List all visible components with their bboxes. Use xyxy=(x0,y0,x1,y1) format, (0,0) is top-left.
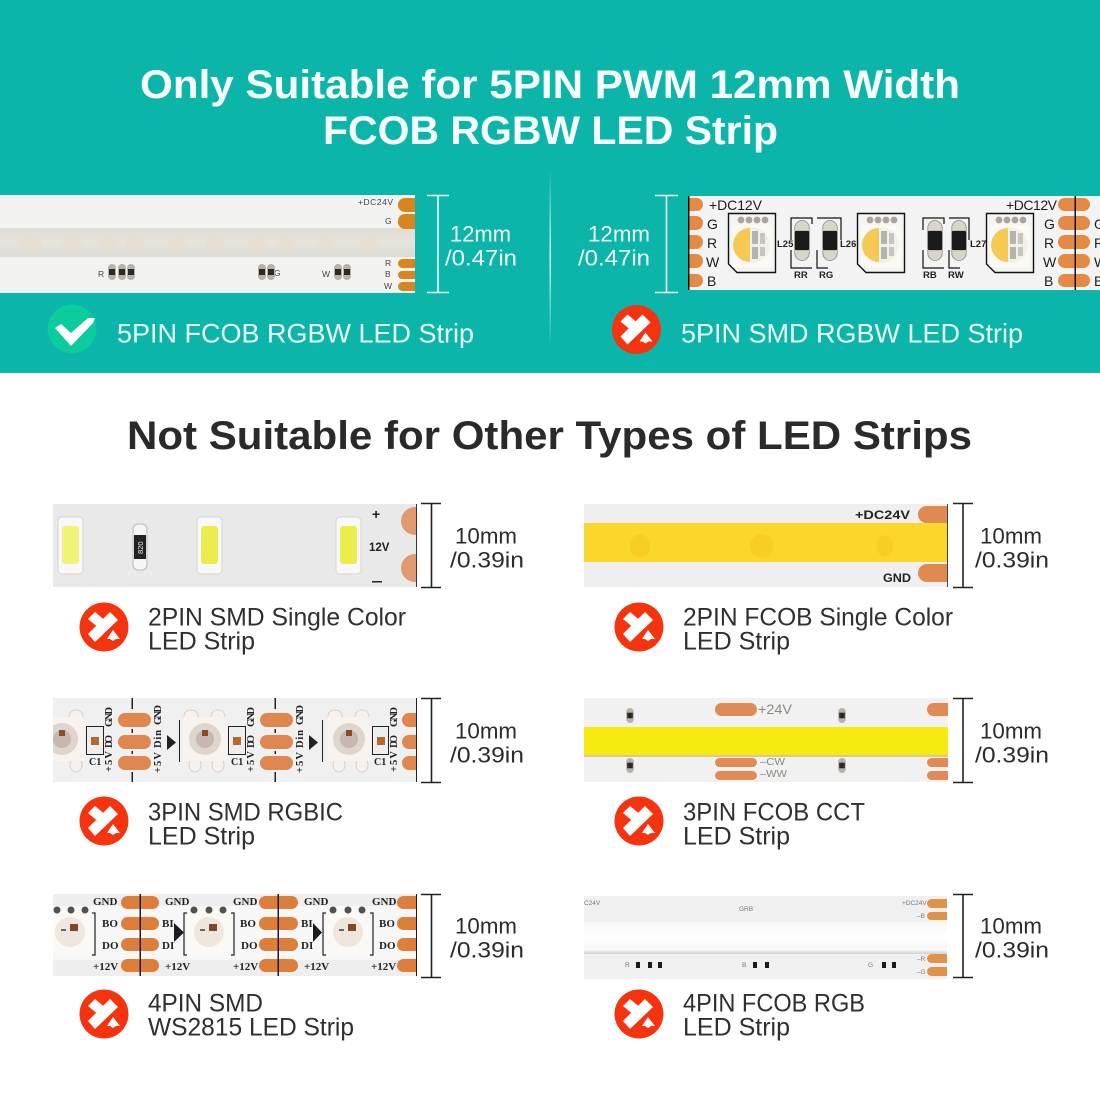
strip photo: 3PIN FCOB CCT xyxy=(584,698,967,782)
strip photo: 3PIN RGBIC: GND xyxy=(295,705,306,725)
strip photo: 2PIN FCOB: GND xyxy=(883,571,911,585)
dimension bracket xyxy=(953,698,973,782)
dimension text xyxy=(975,718,1049,768)
label xyxy=(683,604,953,656)
strip photo: 3PIN RGBIC: Din xyxy=(295,730,306,748)
dimension text: 12mm / 0.47in: /0.47in xyxy=(445,246,517,270)
strip photo: 4PIN WS2815: GND xyxy=(233,896,258,908)
strip photo: 4PIN FCOB RGB: G xyxy=(868,962,873,969)
strip photo: 4PIN WS2815 xyxy=(48,894,437,976)
strip photo: 3PIN RGBIC: GND xyxy=(389,707,400,727)
strip photo: 2PIN SMD: 820 xyxy=(136,541,145,554)
icon: red cross xyxy=(614,602,664,652)
panel: 4PIN FCOB RGB xyxy=(584,894,1049,1042)
strip photo: 4PIN WS2815: DO xyxy=(102,940,119,952)
strip photo: 4PIN WS2815: +12V xyxy=(371,961,396,973)
dimension bracket xyxy=(421,504,441,588)
strip photo: 5PIN SMD RGBW: RW xyxy=(948,270,964,281)
strip photo: 4PIN WS2815: BO xyxy=(379,918,395,930)
strip photo: 2PIN SMD: 12V xyxy=(369,542,390,554)
dimension text: 12mm / 0.47in: 12mm xyxy=(450,222,511,246)
dimension text xyxy=(975,914,1049,962)
strip photo: 5PIN FCOB RGBW: G xyxy=(274,268,281,278)
strip photo: 2PIN FCOB xyxy=(584,504,958,587)
dimension bracket xyxy=(421,894,441,978)
panel: suitable FCOB RGBW strip xyxy=(0,195,517,354)
icon: red cross xyxy=(614,796,664,846)
strip photo: 5PIN SMD RGBW: B xyxy=(707,273,716,289)
strip photo: 5PIN SMD RGBW: L27 xyxy=(970,239,986,250)
strip photo: 3PIN RGBIC: DO xyxy=(246,735,257,748)
strip photo: 4PIN WS2815: DI xyxy=(301,940,313,952)
dimension text: 10mm xyxy=(980,914,1042,938)
strip photo: 5PIN SMD RGBW: R xyxy=(1044,235,1054,251)
title: FCOB RGBW LED Strip xyxy=(323,109,778,153)
strip photo: 5PIN SMD RGBW: B xyxy=(1044,273,1053,289)
strip photo: 5PIN FCOB RGBW: W xyxy=(322,269,330,279)
panel: 4PIN SMD WS2815 xyxy=(48,894,524,1042)
strip photo: 5PIN SMD RGBW: RB xyxy=(923,270,937,281)
strip photo: 4PIN WS2815: BI xyxy=(162,918,174,930)
strip photo: 3PIN RGBIC: GND xyxy=(153,705,164,725)
strip photo: 3PIN RGBIC: Din xyxy=(153,730,164,748)
strip photo: 3PIN RGBIC: DO xyxy=(389,735,400,748)
strip photo: 4PIN WS2815: BI xyxy=(301,918,313,930)
strip photo: 2PIN FCOB: +DC24V xyxy=(855,508,910,522)
strip photo: 4PIN WS2815: DI xyxy=(162,940,174,952)
strip photo: 4PIN FCOB RGB: B xyxy=(742,962,746,969)
strip photo: 5PIN FCOB RGBW: R xyxy=(98,269,104,279)
dimension bracket: 12mm xyxy=(655,196,678,292)
icon: red cross xyxy=(612,305,661,354)
label xyxy=(683,798,865,850)
section heading: Not Suitable for Other Types of LED Strips xyxy=(127,414,972,458)
label: LED Strip xyxy=(683,822,790,850)
strip photo: 5PIN SMD RGBW: W xyxy=(706,254,720,270)
strip photo: 3PIN RGBIC: +5V xyxy=(104,751,115,772)
teal header background xyxy=(0,0,1100,373)
strip photo: 4PIN WS2815: +12V xyxy=(304,961,329,973)
strip photo: 5PIN SMD RGBW: G xyxy=(707,216,718,232)
strip photo: 4PIN WS2815: GND xyxy=(304,896,328,908)
strip photo: 5PIN FCOB RGBW: G xyxy=(385,216,392,226)
strip photo: 2PIN SMD xyxy=(53,504,429,587)
strip photo: 5PIN FCOB RGBW: B xyxy=(385,269,391,279)
title xyxy=(140,63,960,153)
strip photo: 3PIN RGBIC xyxy=(40,698,435,782)
divider xyxy=(550,168,551,346)
dimension text: 10mm xyxy=(980,524,1042,548)
icon: red cross xyxy=(80,602,128,652)
label: LED Strip xyxy=(683,1014,790,1042)
strip photo: 5PIN FCOB RGBW: +DC24V xyxy=(358,197,393,207)
dimension text xyxy=(450,718,524,768)
strip photo: 4PIN FCOB RGB: R xyxy=(625,962,630,969)
title: Only Suitable for 5PIN PWM 12mm Width xyxy=(140,63,960,107)
strip photo: 3PIN FCOB CCT: –WW xyxy=(760,769,788,780)
panel: 2PIN FCOB Single Color xyxy=(584,504,1049,656)
strip photo: 4PIN FCOB RGB: –B xyxy=(917,913,925,920)
icon: red cross xyxy=(614,990,664,1038)
strip photo: 3PIN RGBIC: C1 xyxy=(89,757,101,768)
strip photo: 4PIN FCOB RGB: GRB xyxy=(739,906,753,913)
dimension text: 12mm / 0.47in: /0.47in xyxy=(578,246,650,270)
strip photo: 5PIN FCOB RGBW: R xyxy=(385,258,391,268)
dimension text xyxy=(975,524,1049,572)
strip photo: 5PIN SMD RGBW: G xyxy=(1044,216,1055,232)
label: WS2815 LED Strip xyxy=(148,1014,354,1042)
label: 3PIN SMD RGBIC xyxy=(148,798,343,826)
panel: unsuitable SMD RGBW strip xyxy=(578,196,1100,354)
label: 4PIN SMD xyxy=(148,990,263,1018)
strip photo: 4PIN WS2815: BO xyxy=(102,918,118,930)
dimension text: /0.39in xyxy=(975,742,1049,768)
panel: 2PIN SMD Single Color xyxy=(53,504,524,656)
label: 5PIN SMD RGBW LED Strip: 5PIN SMD RGBW LED Strip xyxy=(681,318,1023,348)
strip photo: 3PIN RGBIC: DO xyxy=(104,735,115,748)
strip photo: 3PIN RGBIC: GND xyxy=(104,707,115,727)
strip photo: 5PIN SMD RGBW: W xyxy=(1043,254,1057,270)
icon: red cross xyxy=(80,796,128,846)
strip photo: 4PIN WS2815: DO xyxy=(379,940,396,952)
strip photo: 4PIN WS2815: GND xyxy=(372,896,396,908)
dimension bracket xyxy=(953,504,973,588)
dimension text: 12mm / 0.47in xyxy=(578,222,650,270)
dimension text xyxy=(450,914,524,962)
strip photo: 5PIN FCOB RGBW: W xyxy=(384,281,392,291)
dimension text: /0.39in xyxy=(975,548,1049,572)
panel: 3PIN SMD RGBIC xyxy=(40,698,524,850)
dimension text: /0.39in xyxy=(450,742,524,768)
strip photo: 4PIN WS2815: GND xyxy=(165,896,190,908)
dimension bracket xyxy=(421,698,441,782)
label: 2PIN SMD Single Color xyxy=(148,604,406,632)
strip photo: 3PIN FCOB CCT: +24V xyxy=(758,702,792,717)
label xyxy=(148,604,406,656)
strip photo: 5PIN SMD RGBW: +DC12V xyxy=(709,197,763,213)
strip photo: 5PIN SMD RGBW: L26 xyxy=(840,239,856,250)
icon: green check xyxy=(48,304,96,354)
strip photo: 2PIN SMD: + xyxy=(372,506,380,522)
strip photo: 4PIN WS2815: +12V xyxy=(165,961,190,973)
strip photo: 3PIN RGBIC: +5V xyxy=(153,752,164,773)
label xyxy=(683,990,865,1042)
strip photo: 3PIN RGBIC: +5V xyxy=(246,751,257,772)
strip photo: 4PIN FCOB RGB: –R xyxy=(917,956,926,963)
label: 4PIN FCOB RGB xyxy=(683,990,865,1018)
strip photo: 3PIN RGBIC: C1 xyxy=(231,757,243,768)
strip photo: 3PIN RGBIC: C1 xyxy=(374,757,386,768)
dimension text: 10mm xyxy=(455,718,517,744)
strip photo: 4PIN WS2815: +12V xyxy=(93,961,118,973)
dimension text: /0.39in xyxy=(975,938,1049,962)
strip photo: 5PIN SMD RGBW: RR xyxy=(794,270,808,281)
panel: 3PIN FCOB CCT xyxy=(584,698,1049,850)
label: 2PIN FCOB Single Color xyxy=(683,604,953,632)
dimension text: 10mm xyxy=(455,524,517,548)
strip photo: 5PIN SMD RGBW: R xyxy=(707,235,717,251)
label: LED Strip xyxy=(683,628,790,656)
strip photo: 4PIN WS2815: GND xyxy=(93,896,118,908)
label: LED Strip xyxy=(148,628,255,656)
strip photo: 3PIN RGBIC: +5V xyxy=(389,751,400,772)
strip photo: 5PIN FCOB RGBW xyxy=(0,195,428,293)
label xyxy=(148,990,354,1042)
icon: red cross xyxy=(80,990,128,1038)
label: 3PIN FCOB CCT xyxy=(683,798,865,826)
strip photo: 4PIN FCOB RGB: C24V xyxy=(584,900,601,907)
strip photo: 5PIN SMD RGBW: RG xyxy=(819,270,833,281)
dimension bracket: 12mm xyxy=(427,196,449,292)
strip photo: 4PIN WS2815: DO xyxy=(241,940,258,952)
strip photo: 4PIN WS2815: +12V xyxy=(233,961,258,973)
strip photo: 3PIN RGBIC: GND xyxy=(246,707,257,727)
strip photo: 4PIN WS2815: BO xyxy=(240,918,256,930)
label: 5PIN FCOB RGBW LED Strip: 5PIN FCOB RGBW LED Strip xyxy=(117,318,474,348)
strip photo: 5PIN SMD RGBW xyxy=(670,196,1100,290)
strip photo: 4PIN FCOB RGB xyxy=(584,896,967,979)
dimension text: /0.39in xyxy=(450,938,524,962)
strip photo: 4PIN FCOB RGB: –G xyxy=(917,969,926,976)
strip photo: 5PIN SMD RGBW: +DC12V xyxy=(1006,197,1058,213)
dimension text: 12mm / 0.47in: 12mm xyxy=(588,222,650,246)
strip photo: 5PIN SMD RGBW: L25 xyxy=(777,239,794,250)
dimension text: 10mm xyxy=(980,718,1042,744)
strip photo: 3PIN FCOB CCT: –CW xyxy=(760,757,786,768)
dimension text: 10mm xyxy=(455,914,517,938)
label xyxy=(148,798,343,850)
dimension bracket xyxy=(953,894,973,978)
label: LED Strip xyxy=(148,822,255,850)
dimension text: 12mm / 0.47in xyxy=(445,222,517,270)
dimension text: /0.39in xyxy=(450,548,524,572)
strip photo: 4PIN FCOB RGB: +DC24V xyxy=(902,900,927,907)
strip photo: 3PIN RGBIC: +5V xyxy=(295,752,306,773)
dimension text xyxy=(450,524,524,572)
